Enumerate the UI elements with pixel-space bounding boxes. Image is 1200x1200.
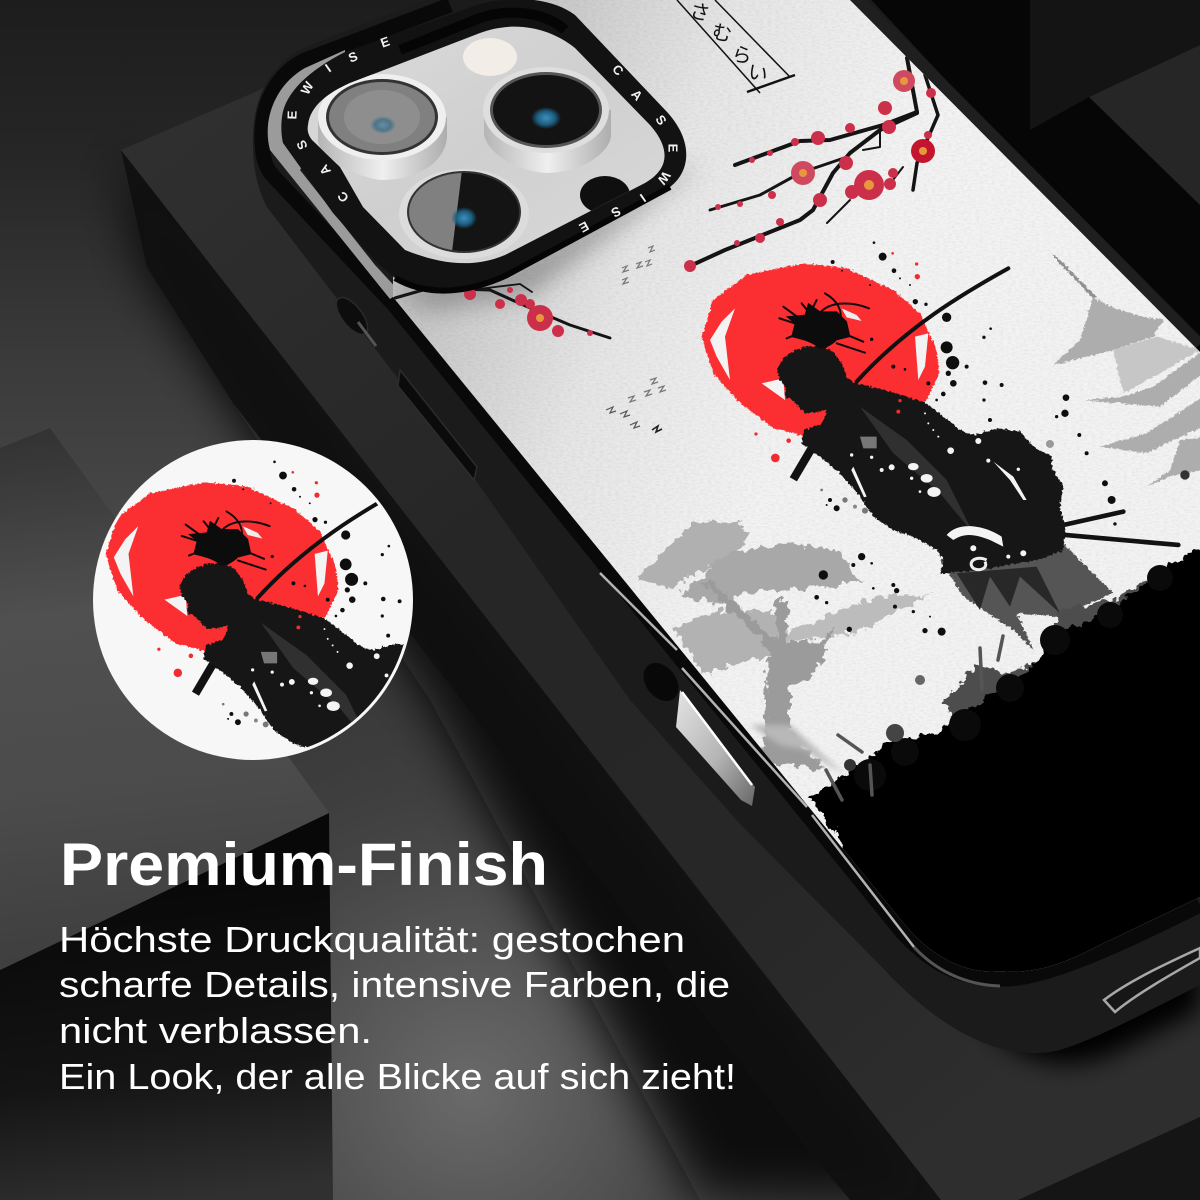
- island logo lettering: W: [297, 78, 317, 97]
- kanji text: [693, 3, 766, 80]
- island logo lettering: I: [637, 191, 649, 205]
- lens top right: [483, 67, 611, 173]
- paper grain: [393, 0, 1200, 842]
- scabbards: [1063, 512, 1178, 545]
- island logo lettering: C: [609, 61, 627, 79]
- ink wash hillside: [808, 549, 1200, 972]
- island logo lettering: E: [284, 110, 300, 120]
- description text: Ein Look, der alle Blicke auf sich zieht!: [59, 1056, 736, 1097]
- camera shadow: [395, 165, 700, 310]
- inset magnified artwork: [105, 460, 404, 748]
- island logo lettering: E: [666, 144, 680, 153]
- cherry blossoms: [464, 70, 936, 337]
- description text: Höchste Druckqualität: gestochen: [59, 919, 685, 960]
- robe highlight washes: [860, 407, 973, 533]
- sword blade: [857, 268, 1008, 382]
- kanji text: む: [710, 21, 734, 47]
- lens top left: [318, 74, 447, 180]
- camera island: [281, 0, 686, 291]
- island logo lettering: S: [293, 138, 311, 152]
- samurai figure and sun: [702, 241, 1190, 650]
- description text: scharfe Details, intensive Farben, die: [59, 964, 730, 1005]
- circular detail inset: [93, 440, 413, 760]
- island logo lettering: C: [334, 188, 352, 206]
- island logo lettering: S: [652, 112, 670, 128]
- white paint flecks: [850, 412, 1027, 559]
- island logo lettering: I: [322, 61, 334, 75]
- kanji text: い: [746, 61, 770, 87]
- island logo lettering: W: [654, 169, 674, 188]
- lidar hole: [580, 176, 630, 214]
- kanji text: ら: [730, 43, 754, 69]
- misty tree: [638, 520, 933, 775]
- kanji plaque: [677, 0, 795, 93]
- sun brush gaps: [710, 308, 928, 400]
- description text: nicht verblassen.: [59, 1010, 372, 1051]
- camera glass: [308, 27, 665, 263]
- ink blobs along ridge: [854, 565, 1173, 791]
- artwork on case back: [393, 0, 1200, 972]
- pagoda: [1052, 255, 1200, 487]
- robe and head silhouette: [777, 346, 1065, 575]
- island logo lettering: S: [608, 203, 623, 221]
- island logo lettering: E: [378, 33, 392, 51]
- hair highlight: [842, 308, 862, 321]
- lower robe strips: [940, 543, 1113, 650]
- white squiggle on hem: [971, 558, 987, 570]
- paper background: [393, 0, 1200, 972]
- sword handle: [793, 420, 828, 479]
- ink splatter: [814, 241, 1190, 636]
- island logo lettering: A: [316, 161, 334, 178]
- cherry branches upper: [395, 58, 938, 338]
- red splatter: [754, 252, 920, 462]
- island logo lettering: S: [346, 48, 360, 66]
- case buttons and ports: [331, 293, 1200, 1012]
- camera lenses: [318, 38, 630, 260]
- reflective band around island: [268, 50, 400, 299]
- island logo lettering: E: [576, 218, 591, 236]
- hair topknot: [779, 293, 869, 353]
- island logo lettering: A: [628, 86, 646, 104]
- heading: Premium-Finish: [60, 831, 548, 898]
- sky birds: [606, 246, 666, 432]
- kanji text: さ: [688, 0, 712, 26]
- red sun: [702, 263, 939, 444]
- lens bottom: [399, 165, 530, 260]
- blossom centres: [536, 77, 927, 322]
- flash: [463, 38, 517, 76]
- phone case body: [253, 0, 1200, 1064]
- description text: [59, 919, 736, 1097]
- inset white disc: [93, 440, 413, 760]
- island logo lettering: [284, 33, 680, 236]
- island black ring: [281, 0, 686, 291]
